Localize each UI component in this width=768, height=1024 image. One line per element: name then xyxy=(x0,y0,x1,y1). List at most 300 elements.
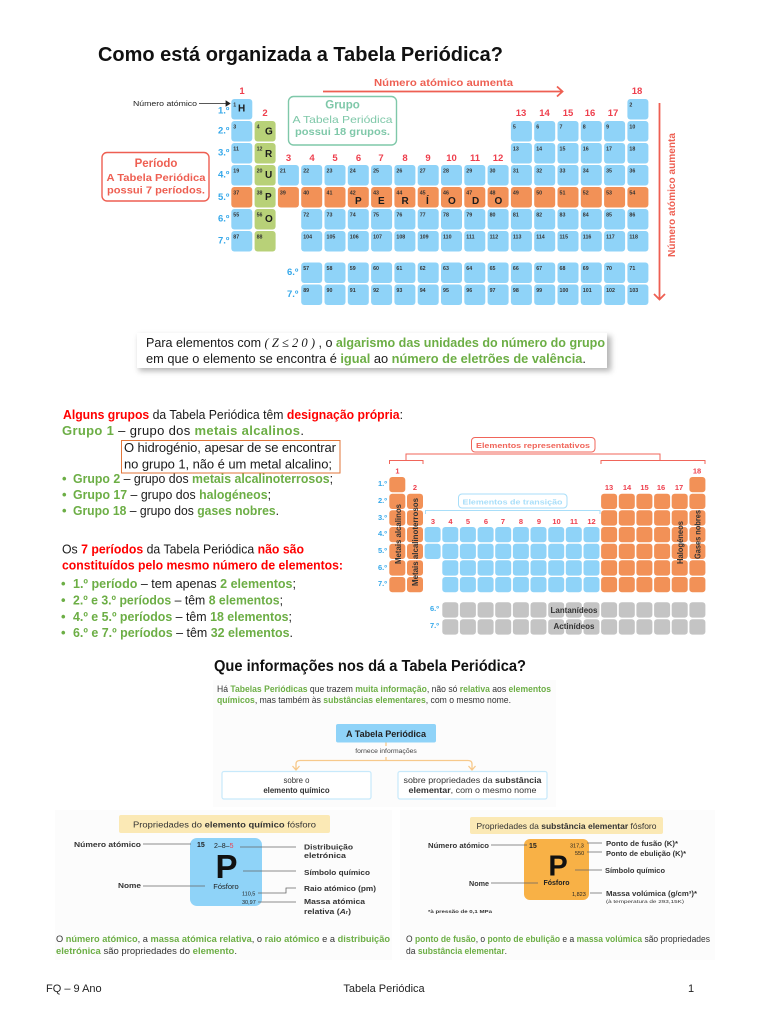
element card: 15 xyxy=(529,843,537,850)
row 5: 48 xyxy=(490,190,496,196)
row 5: 49 xyxy=(513,190,519,196)
callout: grupo xyxy=(288,96,396,145)
callout: grupo: A Tabela Periódica xyxy=(292,114,393,126)
period labels: families table: 7.º xyxy=(378,579,387,588)
callout lines xyxy=(143,844,296,902)
family labels: Lantanídeos xyxy=(550,605,598,615)
row 5 xyxy=(231,187,648,208)
row 7 xyxy=(389,577,705,592)
heading: que informacoes: Que informações nos dá a Tabela Periódica? xyxy=(214,658,526,675)
text block: named groups: • xyxy=(62,487,67,502)
actinides row: 93 xyxy=(396,288,402,294)
group numbers: 8 xyxy=(402,153,408,164)
group numbers: families table: 13 xyxy=(605,483,613,492)
row 2 xyxy=(389,494,705,509)
box: elemento quimico: elemento químico xyxy=(263,786,330,795)
row 3: 14 xyxy=(536,146,542,152)
actinides row: 96 xyxy=(466,288,472,294)
row 1 xyxy=(389,477,705,492)
callout labels: Raio atómico (pm) xyxy=(304,884,377,893)
row 6: 55 xyxy=(233,212,239,218)
group numbers: families table: 15 xyxy=(640,483,649,492)
row 5: 43 xyxy=(373,190,379,196)
row 3: 16 xyxy=(583,146,589,152)
row 5: 46 xyxy=(443,190,449,196)
row 4: 29 xyxy=(466,168,472,174)
element card: Fósforo xyxy=(213,882,239,891)
connector arrows xyxy=(292,742,476,770)
row 6: O xyxy=(265,214,273,225)
family labels: Halogéneos xyxy=(675,521,685,564)
actinides row xyxy=(442,619,705,635)
row 7 xyxy=(231,231,648,252)
row 6: 79 xyxy=(466,212,472,218)
concept map xyxy=(222,724,547,799)
row 4: 34 xyxy=(583,168,589,174)
text block: periods: 4.º e 5.º períodos – têm 18 elementos; xyxy=(73,609,292,624)
lanthanides row: 57 xyxy=(303,266,309,272)
element card: P xyxy=(215,848,238,885)
actinides row: 95 xyxy=(443,288,449,294)
row 5: 50 xyxy=(536,190,542,196)
text block: named groups: Grupo 17 – grupo dos halogéneos; xyxy=(73,487,271,502)
bracket: elementos representativos xyxy=(390,438,705,464)
text block: named groups: Grupo 18 – grupo dos gases nobres. xyxy=(73,503,279,518)
lanthanides row: 71 xyxy=(629,266,635,272)
row 5: P xyxy=(265,192,272,203)
callout labels: (à temperatura de 293,15K) xyxy=(606,899,685,905)
text block: periods: • xyxy=(61,576,66,591)
callout labels: Símbolo químico xyxy=(304,868,370,877)
actinides row: 98 xyxy=(513,288,519,294)
group numbers: families table: 3 xyxy=(431,517,435,526)
row 2: 4 xyxy=(257,124,260,130)
row 2: 8 xyxy=(583,124,586,130)
row 5: E xyxy=(378,196,385,207)
row 4: 21 xyxy=(280,168,286,174)
row 6: 84 xyxy=(583,212,589,218)
actinides row: 92 xyxy=(373,288,379,294)
actinides row: 97 xyxy=(490,288,496,294)
period labels: 4.º xyxy=(218,170,230,180)
atomic number pointer: Número atómico xyxy=(133,99,197,108)
row 5: 44 xyxy=(396,190,402,196)
text block: named groups: • xyxy=(62,503,67,518)
row 2: G xyxy=(265,126,273,138)
row 6 xyxy=(231,209,648,230)
row 7: 112 xyxy=(490,234,498,240)
text block: periods: • xyxy=(61,609,66,624)
lanthanides row: 64 xyxy=(466,266,472,272)
callout labels: Nome xyxy=(118,881,141,890)
box: substancia elementar xyxy=(398,772,547,799)
note: valence electrons xyxy=(137,333,611,371)
group numbers: families table: 11 xyxy=(570,517,578,526)
group numbers: 5 xyxy=(332,153,338,164)
element card: Fósforo xyxy=(543,880,570,887)
row 7: 113 xyxy=(513,234,521,240)
caption: O número atómico, a massa atómica relativa, o raio atómico e a distribuição xyxy=(56,934,390,945)
callout: periodo xyxy=(102,152,209,201)
row 2: 10 xyxy=(629,124,635,130)
group numbers: families table: 1 xyxy=(395,466,400,476)
callout: periodo: A Tabela Periódica xyxy=(106,172,206,184)
row 3: 13 xyxy=(513,146,519,152)
row 7: 104 xyxy=(303,234,312,240)
concept: a tabela periodica: A Tabela Periódica xyxy=(346,729,427,740)
title: Como está organizada a Tabela Periódica? xyxy=(98,44,503,66)
text block: periods: • xyxy=(61,625,66,640)
row 1: H xyxy=(238,104,245,114)
actinides row: 99 xyxy=(536,288,542,294)
group numbers: 12 xyxy=(493,153,503,164)
callout: grupo: Grupo xyxy=(325,100,360,112)
note: valence electrons: Para elementos com ( Z ≤ 2 0 ) , o algarismo das unidades do número do grupo xyxy=(146,335,605,350)
lanthanides row: 59 xyxy=(350,266,356,272)
element card: P xyxy=(548,850,568,882)
text block: named groups xyxy=(62,407,403,518)
period labels: 5.º xyxy=(218,192,230,203)
periodic table: families xyxy=(389,477,705,635)
group numbers: 11 xyxy=(470,153,481,164)
group numbers: families table: 9 xyxy=(537,517,541,526)
row 6: 77 xyxy=(420,212,426,218)
lanthanides row: 70 xyxy=(606,266,612,272)
family labels: Actinídeos xyxy=(554,621,595,631)
lanthanides row xyxy=(442,602,705,618)
element card xyxy=(524,839,589,900)
row 2 xyxy=(231,121,648,142)
callout labels xyxy=(74,840,377,916)
row 2: 9 xyxy=(606,124,609,130)
callout lines xyxy=(491,843,602,893)
row 1: 2 xyxy=(629,102,632,108)
callout labels: relativa ( Ar) xyxy=(304,907,352,916)
row 6: 83 xyxy=(560,212,565,218)
row 5: O xyxy=(448,196,456,207)
group numbers xyxy=(239,86,642,164)
box: elemento quimico xyxy=(222,772,371,799)
actinides row: 101 xyxy=(583,288,592,294)
row 4: 30 xyxy=(490,168,496,174)
row 6: 76 xyxy=(396,212,402,218)
bracket: elementos de transicao xyxy=(426,494,600,514)
group numbers: 7 xyxy=(378,153,384,164)
lanthanides row: 68 xyxy=(560,266,565,272)
family labels: Gases nobres xyxy=(692,510,702,559)
hydrogen note box xyxy=(122,440,340,473)
period labels: 7.º xyxy=(287,289,299,300)
banner xyxy=(119,815,330,833)
row 5 xyxy=(389,544,705,559)
period labels: 1.º xyxy=(218,106,230,116)
lanthanides row: 67 xyxy=(536,266,542,272)
text block: named groups: Alguns grupos da Tabela Periódica têm designação própria: xyxy=(63,407,403,422)
group numbers: families table xyxy=(395,466,701,526)
element card: 1,823 xyxy=(572,892,586,898)
row 4: 36 xyxy=(629,168,635,174)
callout: grupo: possui 18 grupos. xyxy=(295,126,390,138)
lanthanides row: 66 xyxy=(513,266,519,272)
box: elemento quimico: sobre o xyxy=(283,776,310,785)
row 6: 86 xyxy=(629,212,635,218)
row 5: 39 xyxy=(280,190,286,196)
row 5: 45 xyxy=(420,190,426,196)
callout labels: Ponto de fusão (K)* xyxy=(606,839,678,848)
arrow: atomic number increases vertically: Número atómico aumenta xyxy=(666,133,678,257)
intro text xyxy=(217,684,551,706)
callout labels: Massa atómica xyxy=(304,897,366,906)
group numbers: 15 xyxy=(563,108,574,119)
text block: named groups: Grupo 2 – grupo dos metais alcalinoterrosos; xyxy=(73,471,333,486)
group numbers: 2 xyxy=(262,108,268,119)
box: substancia elementar: sobre propriedades da substância xyxy=(404,776,542,785)
row 5: D xyxy=(472,196,479,207)
lanthanides row: 65 xyxy=(490,266,496,272)
element card: 317,3 xyxy=(570,844,584,850)
period labels: families table: 4.º xyxy=(378,529,387,538)
row 3: 17 xyxy=(606,146,612,152)
text block: periods: 1.º período – tem apenas 2 elementos; xyxy=(73,576,296,591)
row 4: 19 xyxy=(233,168,239,174)
period labels: 2.º xyxy=(218,126,230,136)
text block: periods: 2.º e 3.º períodos – têm 8 elementos; xyxy=(73,592,283,608)
element card: 15 xyxy=(197,842,205,849)
row 6: 78 xyxy=(443,212,449,218)
row 1 xyxy=(231,99,648,120)
row 5: 52 xyxy=(583,190,589,196)
row 4: 27 xyxy=(420,168,426,174)
row 6: 85 xyxy=(606,212,612,218)
row 3: 18 xyxy=(629,146,635,152)
callout: periodo: Período xyxy=(135,158,177,170)
note: valence electrons: em que o elemento se encontra é igual ao número de eletrões de valência. xyxy=(146,351,586,366)
lanthanides row xyxy=(301,262,648,283)
row 4: 20 xyxy=(257,168,263,174)
text block: named groups: Grupo 1 – grupo dos metais alcalinos. xyxy=(62,423,304,438)
callout labels xyxy=(428,839,697,915)
arrow: atomic number increases vertically xyxy=(654,103,678,300)
row 7: 111 xyxy=(466,234,475,240)
callout labels: Massa volúmica (g/cm³)* xyxy=(606,889,697,898)
row 4: 22 xyxy=(303,168,309,174)
element card: 110,5 xyxy=(242,892,255,898)
row 4: U xyxy=(265,170,272,181)
caption xyxy=(406,934,710,957)
row 4: 23 xyxy=(326,168,332,174)
group numbers: families table: 12 xyxy=(587,517,596,526)
row 7: 114 xyxy=(536,234,545,240)
text block: periods xyxy=(61,542,343,640)
row 6: 73 xyxy=(326,212,332,218)
text block: named groups: • xyxy=(62,471,67,486)
row 7: 88 xyxy=(257,234,263,240)
row 5: O xyxy=(494,196,502,207)
row 4 xyxy=(231,165,648,186)
row 7: 108 xyxy=(396,234,405,240)
row 5: 54 xyxy=(629,190,635,196)
actinides row: 89 xyxy=(303,288,309,294)
row 3 xyxy=(231,143,648,164)
row 7: 115 xyxy=(560,234,568,240)
lanthanides row: 58 xyxy=(326,266,332,272)
footer xyxy=(46,983,694,995)
row 6: 81 xyxy=(513,212,519,218)
row 7: 87 xyxy=(233,234,239,240)
row 7: 117 xyxy=(606,234,615,240)
row 5: 40 xyxy=(303,190,309,196)
footer: 1 xyxy=(688,983,694,995)
group numbers: families table: 2 xyxy=(413,483,417,492)
row 3: 12 xyxy=(257,146,263,152)
atomic number pointer xyxy=(133,99,230,108)
period labels: families table: 5.º xyxy=(378,546,387,555)
row 5: P xyxy=(355,196,362,207)
group numbers: 14 xyxy=(539,108,550,119)
row 4: 26 xyxy=(396,168,402,174)
row 4 xyxy=(389,527,705,542)
banner: Propriedades do elemento químico fósforo xyxy=(133,820,316,830)
caption: da substância elementar. xyxy=(406,946,507,957)
group numbers: families table: 6 xyxy=(484,517,488,526)
actinides row: 90 xyxy=(326,288,332,294)
period labels: families table: 6.º xyxy=(378,563,387,572)
element card: 30,97 xyxy=(242,900,256,906)
actinides row: 94 xyxy=(420,288,426,294)
lanthanides row: 63 xyxy=(443,266,449,272)
caption: O ponto de fusão, o ponto de ebulição e a massa volúmica são propriedades xyxy=(406,934,710,945)
period labels: families table: 3.º xyxy=(378,513,387,522)
caption: eletrónica são propriedades do elemento. xyxy=(56,946,237,957)
period labels: families table: 2.º xyxy=(378,496,387,505)
bracket: elementos de transicao: Elementos de transição xyxy=(462,498,563,506)
hydrogen note box: O hidrogénio, apesar de se encontrar xyxy=(124,440,337,455)
bracket: elementos representativos: Elementos representativos xyxy=(476,441,590,450)
period labels: 7.º xyxy=(218,236,230,246)
row 4: 25 xyxy=(373,168,379,174)
lanthanides row: 61 xyxy=(396,266,402,272)
actinides row: 103 xyxy=(629,288,638,294)
row 6: 75 xyxy=(373,212,379,218)
row 6: 82 xyxy=(536,212,542,218)
row 5: Í xyxy=(426,194,429,207)
group numbers: families table: 14 xyxy=(623,483,632,492)
row 5: 41 xyxy=(326,190,332,196)
group numbers: 9 xyxy=(425,153,431,164)
intro text: químicos, mas também às substâncias elementares, com o mesmo nome. xyxy=(217,695,511,706)
callout: periodo: possui 7 períodos. xyxy=(107,184,205,196)
actinides row: 91 xyxy=(350,288,356,294)
banner: Propriedades da substância elementar fósforo xyxy=(476,821,657,831)
period labels: 6.º xyxy=(287,267,299,278)
periodic table: organization xyxy=(231,99,648,305)
footer: FQ – 9 Ano xyxy=(46,983,102,995)
row 5: 47 xyxy=(466,190,472,196)
arrow: atomic number increases horizontally xyxy=(323,77,562,96)
callout labels: Distribuição xyxy=(304,842,353,852)
row 6: 72 xyxy=(303,212,309,218)
lanthanides row: 60 xyxy=(373,266,379,272)
period labels: families table: 6.º xyxy=(430,604,439,613)
caption xyxy=(56,934,390,957)
period labels xyxy=(218,106,299,300)
row 4: 28 xyxy=(443,168,449,174)
row 4: 33 xyxy=(560,168,565,174)
callout labels: eletrónica xyxy=(304,851,347,860)
row 7: 107 xyxy=(373,234,382,240)
callout labels: Nome xyxy=(469,879,489,888)
panel: substance properties xyxy=(406,817,710,957)
group numbers: families table: 7 xyxy=(501,517,505,526)
period labels: 3.º xyxy=(218,148,230,158)
lanthanides row: 62 xyxy=(420,266,426,272)
row 7: 110 xyxy=(443,234,452,240)
callout labels: Ponto de ebulição (K)* xyxy=(606,849,686,858)
group numbers: 18 xyxy=(632,86,642,97)
row 4: 31 xyxy=(513,168,519,174)
row 4: 24 xyxy=(350,168,356,174)
actinides row: 102 xyxy=(606,288,615,294)
period labels: 6.º xyxy=(218,214,230,224)
callout labels: Número atómico xyxy=(74,840,141,849)
period labels: families table: 7.º xyxy=(430,621,439,630)
group numbers: 4 xyxy=(309,153,315,164)
row 2: 7 xyxy=(560,124,562,130)
row 7: 116 xyxy=(583,234,591,240)
group numbers: families table: 4 xyxy=(448,517,453,526)
row 6: 74 xyxy=(350,212,356,218)
row 5: 53 xyxy=(606,190,612,196)
row 5: 51 xyxy=(560,190,565,196)
group numbers: families table: 18 xyxy=(693,466,701,476)
group numbers: families table: 16 xyxy=(657,483,665,492)
text block: periods: 6.º e 7.º períodos – têm 32 elementos. xyxy=(73,625,293,640)
row 1: 1 xyxy=(233,102,236,108)
row 4: 32 xyxy=(536,168,542,174)
row 3 xyxy=(389,510,705,526)
row 3: 15 xyxy=(560,146,565,152)
row 7: 118 xyxy=(629,234,638,240)
callout labels: Número atómico xyxy=(428,841,489,850)
row 2: 6 xyxy=(536,124,539,130)
row 6 xyxy=(389,560,705,576)
panel: element properties xyxy=(56,815,390,957)
actinides row: 100 xyxy=(560,288,568,294)
callout labels: *à pressão de 0,1 MPa xyxy=(428,909,492,915)
row 5: R xyxy=(402,196,410,207)
row 5: 37 xyxy=(233,190,239,196)
row 7: 109 xyxy=(420,234,429,240)
box: substancia elementar: elementar , com o mesmo nome xyxy=(408,786,536,795)
text block: periods: Os 7 períodos da Tabela Periódica não são xyxy=(62,542,304,556)
row 7: 106 xyxy=(350,234,359,240)
group numbers: families table: 8 xyxy=(519,517,523,526)
text block: periods: • xyxy=(61,592,66,608)
element card: 2–8–5 xyxy=(214,843,234,850)
banner xyxy=(470,817,663,834)
row 6: 56 xyxy=(257,212,263,218)
row 2: 5 xyxy=(513,124,516,130)
hydrogen note box: no grupo 1, não é um metal alcalino; xyxy=(124,456,332,472)
group numbers: 10 xyxy=(446,153,457,164)
element card xyxy=(190,838,262,906)
element card: 550 xyxy=(575,851,584,857)
family labels xyxy=(393,498,702,631)
row 6: 80 xyxy=(490,212,496,218)
period labels: families table: 1.º xyxy=(378,479,387,488)
group numbers: families table: 5 xyxy=(466,517,470,526)
group numbers: 13 xyxy=(516,108,526,119)
